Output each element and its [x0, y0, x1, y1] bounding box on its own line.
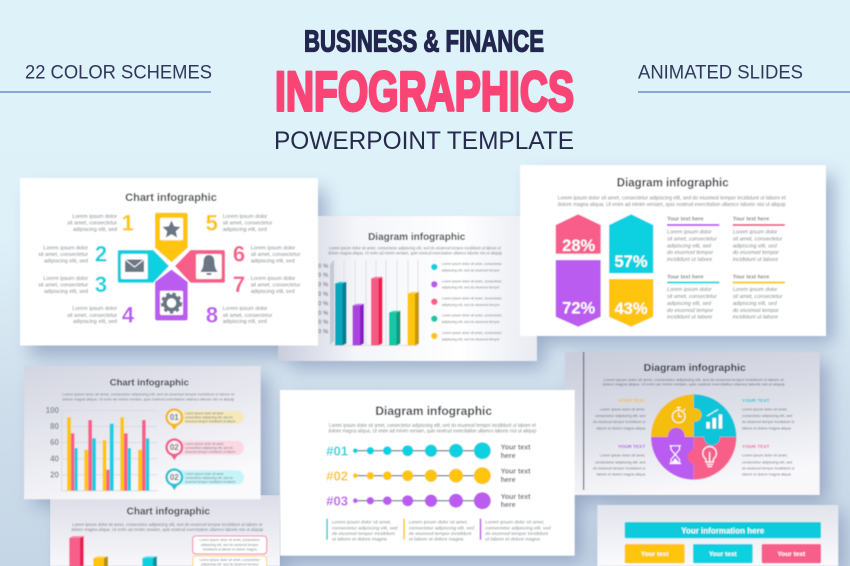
panel intro text: Lorem ipsum dolor sit amet, consectetur adipiscing elit, sed do eiusmod tempor incididunt ut labore et [329, 246, 502, 250]
panel intro text [62, 392, 235, 401]
text column 1 bottom: Lorem ipsum dolor [667, 287, 712, 293]
axis labels: 0 % [318, 282, 329, 288]
left captions: adipiscing elit, sed [44, 258, 88, 264]
text column 1 bottom [667, 274, 719, 320]
panel intro text: dolore magna aliqua. Ut enim ad minim veniam, quis nostrud exercitation ullamco laboris nisi ut aliquip [71, 527, 264, 532]
left captions: Lorem ipsum dolor [72, 306, 117, 312]
text: purple item: Lorem ipsum dolor sit amet, [600, 454, 645, 458]
text: yellow item: consectetur adipiscing elit, sed [595, 414, 645, 418]
callout 03: eiusmod tempor incididunt ut labore [185, 480, 236, 484]
panel intro text: Lorem ipsum dolor sit amet, consectetur adipiscing elit, sed do eiusmod tempor incididunt ut labore et [604, 377, 785, 382]
note 3: ut labore et dolore magna [485, 536, 540, 542]
grouped bars [67, 417, 149, 491]
callout 03: 02 [170, 473, 179, 482]
panel intro text [328, 246, 503, 256]
right captions: adipiscing elit, sed [223, 227, 267, 233]
panel intro text [328, 423, 536, 435]
text column 2 top: sit amet, consectetur [733, 236, 783, 242]
legend: Lorem ipsum dolor sit amet, consectetur [442, 297, 502, 301]
callout 01: consectetur adipiscing elit, sed do [185, 416, 233, 420]
text: yellow item: YOUR TEXT [618, 398, 645, 404]
axis labels: 0 % [318, 302, 329, 308]
legend: Lorem ipsum dolor sit amet, consectetur [442, 262, 502, 266]
callout 02: eiusmod tempor incididunt ut labore [185, 450, 236, 454]
y axis labels: 100 [46, 406, 60, 415]
right captions: adipiscing elit, sed [223, 319, 267, 325]
left captions: sit amet, consectetur [67, 221, 117, 227]
numbers: 7 [233, 272, 245, 297]
note 1: ut labore et dolore magna [332, 536, 387, 542]
pink block 28%: 28% [562, 237, 596, 255]
numbers [95, 211, 245, 328]
callout 01: eiusmod tempor incididunt ut labore [185, 420, 236, 424]
panel intro text [558, 196, 786, 208]
axis labels: 0 % [318, 311, 329, 317]
text: pink item: Lorem ipsum dolor sit amet, [742, 454, 788, 458]
text: pink item: YOUR TEXT [742, 444, 770, 450]
y axis labels: 80 [50, 422, 60, 431]
pink outlined note: incididunt ut labore et dolore magna [203, 548, 257, 552]
text column 1 bottom: do eiusmod tempor [667, 308, 713, 314]
note 1: Lorem ipsum dolor sit amet, [332, 520, 391, 526]
icon: stopwatch [672, 408, 685, 423]
text: cyan item: do eiusmod tempor incididunt ut [742, 420, 794, 424]
row 01 [326, 442, 531, 460]
right captions: Lorem ipsum dolor [223, 306, 268, 312]
row 02: #02 [326, 468, 348, 483]
panel intro text: dolore magna aliqua. Ut enim ad minim veniam, quis nostrud exercitation ullamco laboris nisi ut aliquip [558, 202, 786, 208]
text column 2 top: incididunt ut labore [733, 257, 778, 263]
axis labels: 0 % [318, 330, 329, 336]
right captions: Lorem ipsum dolor [223, 214, 268, 220]
axis labels: 0 % [318, 320, 329, 326]
right captions: sit amet, consectetur [251, 252, 301, 258]
callout 01: Lorem ipsum dolor sit amet [185, 412, 224, 416]
left captions: Lorem ipsum dolor [43, 276, 88, 282]
y axis labels: 40 [50, 454, 60, 464]
note 2 [403, 519, 474, 542]
legend: Lorem ipsum dolor sit amet, consectetur [442, 331, 502, 335]
axis labels: 0 % [318, 292, 329, 298]
text column 2 bottom: adipiscing elit, sed [733, 301, 778, 307]
heading: business and finance: BUSINESS & FINANCE [304, 24, 544, 58]
arrow: pink bell [175, 250, 225, 283]
legend: adipiscing elit, sed do eiusmod tempor [442, 286, 500, 290]
text column 1 top: incididunt ut labore [667, 257, 712, 263]
cyan box [693, 544, 753, 563]
legend: adipiscing elit, sed do eiusmod tempor [442, 268, 500, 272]
text: purple item: do eiusmod tempor incididunt ut [593, 466, 645, 470]
pink box: Your text [777, 551, 806, 558]
panel: puzzle diagram [565, 352, 820, 495]
row 03: #03 [326, 493, 348, 508]
callout 02: 02 [170, 443, 179, 452]
text column 2 top: do eiusmod tempor [733, 250, 779, 256]
axis labels: 0 % [318, 264, 329, 270]
text: pink item [742, 444, 794, 477]
numbers: 3 [95, 272, 107, 297]
yellow outlined note [193, 556, 267, 566]
arrow: cyan mail [118, 250, 169, 283]
panel title: Diagram infographic [368, 232, 466, 243]
teal header bar [625, 522, 821, 538]
heading: infographics: INFOGRAPHICS [275, 60, 574, 122]
text: purple item: YOUR TEXT [618, 444, 645, 450]
panel: percentage diagram [520, 165, 826, 336]
panel title: Chart infographic [127, 506, 210, 518]
panel title: Diagram infographic [644, 362, 746, 374]
purple block 72% [556, 260, 601, 327]
icon: bar chart arrow [706, 410, 722, 428]
row 01: here [501, 453, 516, 460]
text column 2 bottom: do eiusmod tempor [733, 308, 779, 314]
panel: dotted timeline diagram [280, 390, 575, 556]
panel intro text: Lorem ipsum dolor sit amet, consectetur adipiscing elit, sed do eiusmod tempor incididunt ut labore et [72, 522, 263, 527]
panel intro text: dolore magna aliqua. Ut enim ad minim veniam, quis nostrud exercitation ullamco laboris nisi ut aliquip [62, 396, 235, 401]
panel: information boxes [597, 505, 838, 566]
text: pink item: do eiusmod tempor incididunt ut [742, 466, 794, 470]
3D bars [335, 277, 419, 346]
cyan box: Your text [709, 551, 737, 558]
right captions: Lorem ipsum dolor [251, 246, 296, 252]
right captions: sit amet, consectetur [223, 313, 273, 319]
panel intro text [603, 377, 785, 387]
yellow block 43%: 43% [614, 300, 648, 318]
row 01: #01 [326, 443, 348, 458]
panel intro text: Lorem ipsum dolor sit amet, consectetur adipiscing elit, sed do eiusmod tempor incididunt ut labore et [62, 392, 235, 396]
row 03: Your text [501, 494, 531, 501]
note 2: Lorem ipsum dolor sit amet, [409, 520, 468, 526]
note 3: do eiusmod tempor incididunt [485, 531, 549, 537]
text column 1 bottom: adipiscing elit, sed [667, 301, 712, 307]
chart gridlines [62, 405, 157, 491]
panel shadows [30, 175, 844, 566]
cyan block 57%: 57% [614, 253, 648, 271]
numbers: 8 [206, 303, 218, 328]
text column 1 top: sit amet, consectetur [667, 236, 717, 242]
text: yellow item: labore et dolore magna aliqua [597, 427, 646, 431]
callout 01: 01 [170, 413, 179, 422]
callout 02 [165, 438, 244, 460]
icon: light bulb [703, 446, 716, 466]
right captions: sit amet, consectetur [223, 221, 273, 227]
text column 2 bottom: incididunt ut labore [733, 314, 778, 320]
note 3: consectetur adipiscing elit, sed [485, 525, 551, 531]
panel intro text: Lorem ipsum dolor sit amet, consectetur adipiscing elit, sed do eiusmod tempor incididunt ut labore et [329, 423, 536, 429]
text: pink item: labore et dolore magna aliqua [742, 473, 792, 477]
right captions: adipiscing elit, sed [251, 289, 295, 295]
note 3: Lorem ipsum dolor sit amet, [485, 520, 544, 526]
text column 2 top: Lorem ipsum dolor [733, 230, 778, 236]
icon: hourglass [670, 446, 681, 464]
text: purple item: consectetur adipiscing elit, sed [595, 460, 645, 464]
note 2: ut labore et dolore magna [409, 536, 464, 542]
panel intro text: dolore magna aliqua. Ut enim ad minim veniam, quis nostrud exercitation ullamco laboris nisi ut aliquip [328, 250, 503, 256]
text column 1 bottom: incididunt ut labore [667, 314, 712, 320]
pink block 28% [556, 214, 601, 255]
text column 1 bottom: Your text here [667, 274, 704, 280]
text column 2 top: Your text here [733, 216, 769, 222]
arrow: yellow star [155, 213, 188, 262]
text column 1 top: adipiscing elit, sed [667, 244, 712, 250]
text: yellow item [593, 398, 646, 431]
text column 2 top: adipiscing elit, sed [733, 244, 778, 250]
text: cyan item: consectetur adipiscing elit, sed [742, 414, 792, 418]
heading: powerpoint template: POWERPOINT TEMPLATE [274, 127, 574, 155]
row 02: here [501, 477, 516, 484]
text column 1 top [667, 216, 719, 263]
row 03: here [501, 502, 516, 509]
text: yellow item: Lorem ipsum dolor sit amet, [600, 407, 645, 411]
note 1: do eiusmod tempor incididunt [332, 531, 395, 537]
callout 01 [165, 408, 244, 430]
left captions: Lorem ipsum dolor [43, 246, 88, 252]
pink outlined note [193, 536, 267, 554]
numbers: 5 [206, 211, 218, 236]
text column 2 bottom: Your text here [733, 274, 769, 280]
text: purple item [593, 444, 646, 477]
text: yellow item: do eiusmod tempor incididunt ut [593, 420, 645, 424]
yellow outlined note: Lorem ipsum dolor sit amet, consectetur [200, 558, 261, 562]
yellow block 43% [609, 279, 653, 327]
y axis labels: 20 [50, 470, 60, 480]
left captions: sit amet, consectetur [67, 313, 117, 319]
axis labels [318, 264, 329, 336]
note 3 [480, 519, 551, 542]
text column 1 top: do eiusmod tempor [667, 250, 713, 256]
text: cyan item: YOUR TEXT [742, 398, 770, 404]
numbers: 2 [95, 242, 107, 267]
panel title: Chart infographic [110, 378, 189, 388]
text column 1 bottom: sit amet, consectetur [667, 294, 717, 300]
panel intro text [71, 522, 264, 532]
left tagline: 22 COLOR SCHEMES [25, 62, 212, 84]
text column 2 bottom: Lorem ipsum dolor [733, 287, 778, 293]
puzzle circle [650, 394, 738, 481]
arrow: purple gear [155, 270, 188, 320]
panel intro text: Lorem ipsum dolor sit amet, consectetur adipiscing elit, sed do eiusmod tempor incididunt ut labore et [558, 196, 786, 202]
text: pink item: consectetur adipiscing elit, sed [742, 460, 792, 464]
text: purple item: labore et dolore magna aliqua [597, 473, 646, 477]
right captions: Lorem ipsum dolor [251, 276, 296, 282]
legend: Lorem ipsum dolor sit amet, consectetur [442, 314, 502, 318]
row 02: Your text [501, 468, 531, 476]
numbers: 6 [233, 242, 245, 267]
cyan block 57% [609, 214, 653, 273]
text: cyan item: Lorem ipsum dolor sit amet, [742, 407, 788, 411]
row 01: Your text [501, 444, 531, 452]
y axis labels [46, 406, 60, 480]
3D bars [69, 536, 157, 566]
panel intro text: dolore magna aliqua. Ut enim ad minim veniam, quis nostrud exercitation ullamco laboris nisi ut aliquip [328, 429, 536, 435]
panel: grouped bar chart [24, 366, 261, 499]
note 1 [326, 519, 398, 542]
yellow box: Your text [641, 551, 669, 558]
left captions [38, 214, 117, 325]
panel: chart infographic cross [20, 178, 318, 346]
numbers: 1 [122, 211, 134, 236]
panel title: Diagram infographic [617, 178, 729, 190]
left captions: sit amet, consectetur [38, 282, 88, 288]
text column 2 top [733, 216, 785, 263]
legend: adipiscing elit, sed do eiusmod tempor [442, 303, 500, 307]
panel title: Chart infographic [125, 192, 217, 204]
text: cyan item [742, 398, 794, 431]
left captions: sit amet, consectetur [38, 252, 88, 258]
legend [431, 262, 502, 341]
left captions: Lorem ipsum dolor [72, 214, 117, 220]
right captions: adipiscing elit, sed [251, 258, 295, 264]
note 2: consectetur adipiscing elit, sed [409, 525, 474, 531]
callout 03 [165, 468, 244, 490]
row 02 [326, 467, 531, 484]
text column 1 top: Lorem ipsum dolor [667, 230, 712, 236]
legend: adipiscing elit, sed do eiusmod tempor [442, 337, 500, 341]
callout 02: consectetur adipiscing elit, sed do [185, 446, 233, 450]
left captions: adipiscing elit, sed [73, 227, 117, 233]
callout 02: Lorem ipsum dolor sit amet [185, 442, 224, 446]
row 03 [326, 492, 531, 509]
teal header bar: Your information here [681, 526, 765, 536]
purple block 72%: 72% [562, 300, 596, 318]
right tagline: ANIMATED SLIDES [638, 62, 803, 84]
legend: adipiscing elit, sed do eiusmod tempor [442, 320, 500, 324]
right captions: sit amet, consectetur [251, 282, 301, 288]
left captions: adipiscing elit, sed [73, 319, 117, 325]
note 1: consectetur adipiscing elit, sed [332, 525, 398, 531]
panel: bar chart 3D diagram [278, 216, 537, 361]
chart grid and axis [329, 260, 418, 346]
panel: chart infographic bottom-left partial [50, 495, 280, 566]
axis labels: 0 % [318, 273, 329, 279]
text: cyan item: labore et dolore magna aliqua [742, 427, 792, 431]
pink outlined note: adipiscing elit, sed do eiusmod tempor [201, 543, 259, 547]
yellow box [625, 544, 685, 563]
left captions: adipiscing elit, sed [44, 289, 88, 295]
y axis labels: 60 [50, 438, 60, 447]
callout 03: consectetur adipiscing elit, sed do [185, 476, 233, 480]
pink box [762, 544, 821, 563]
callout 03: Lorem ipsum dolor sit amet [185, 472, 224, 476]
text column 2 bottom [733, 274, 785, 320]
text column 1 top: Your text here [667, 216, 704, 222]
numbers: 4 [122, 303, 135, 328]
right captions [223, 214, 301, 325]
note 2: do eiusmod tempor incididunt [409, 531, 472, 537]
legend: Lorem ipsum dolor sit amet, consectetur [442, 279, 502, 283]
text column 2 bottom: sit amet, consectetur [733, 294, 783, 300]
panel intro text: dolore magna aliqua. Ut enim ad minim veniam, quis nostrud exercitation ullamco laboris nisi ut aliquip [603, 382, 785, 387]
panel title: Diagram infographic [375, 404, 492, 418]
pink outlined note: Lorem ipsum dolor sit amet, consectetur [200, 538, 261, 542]
